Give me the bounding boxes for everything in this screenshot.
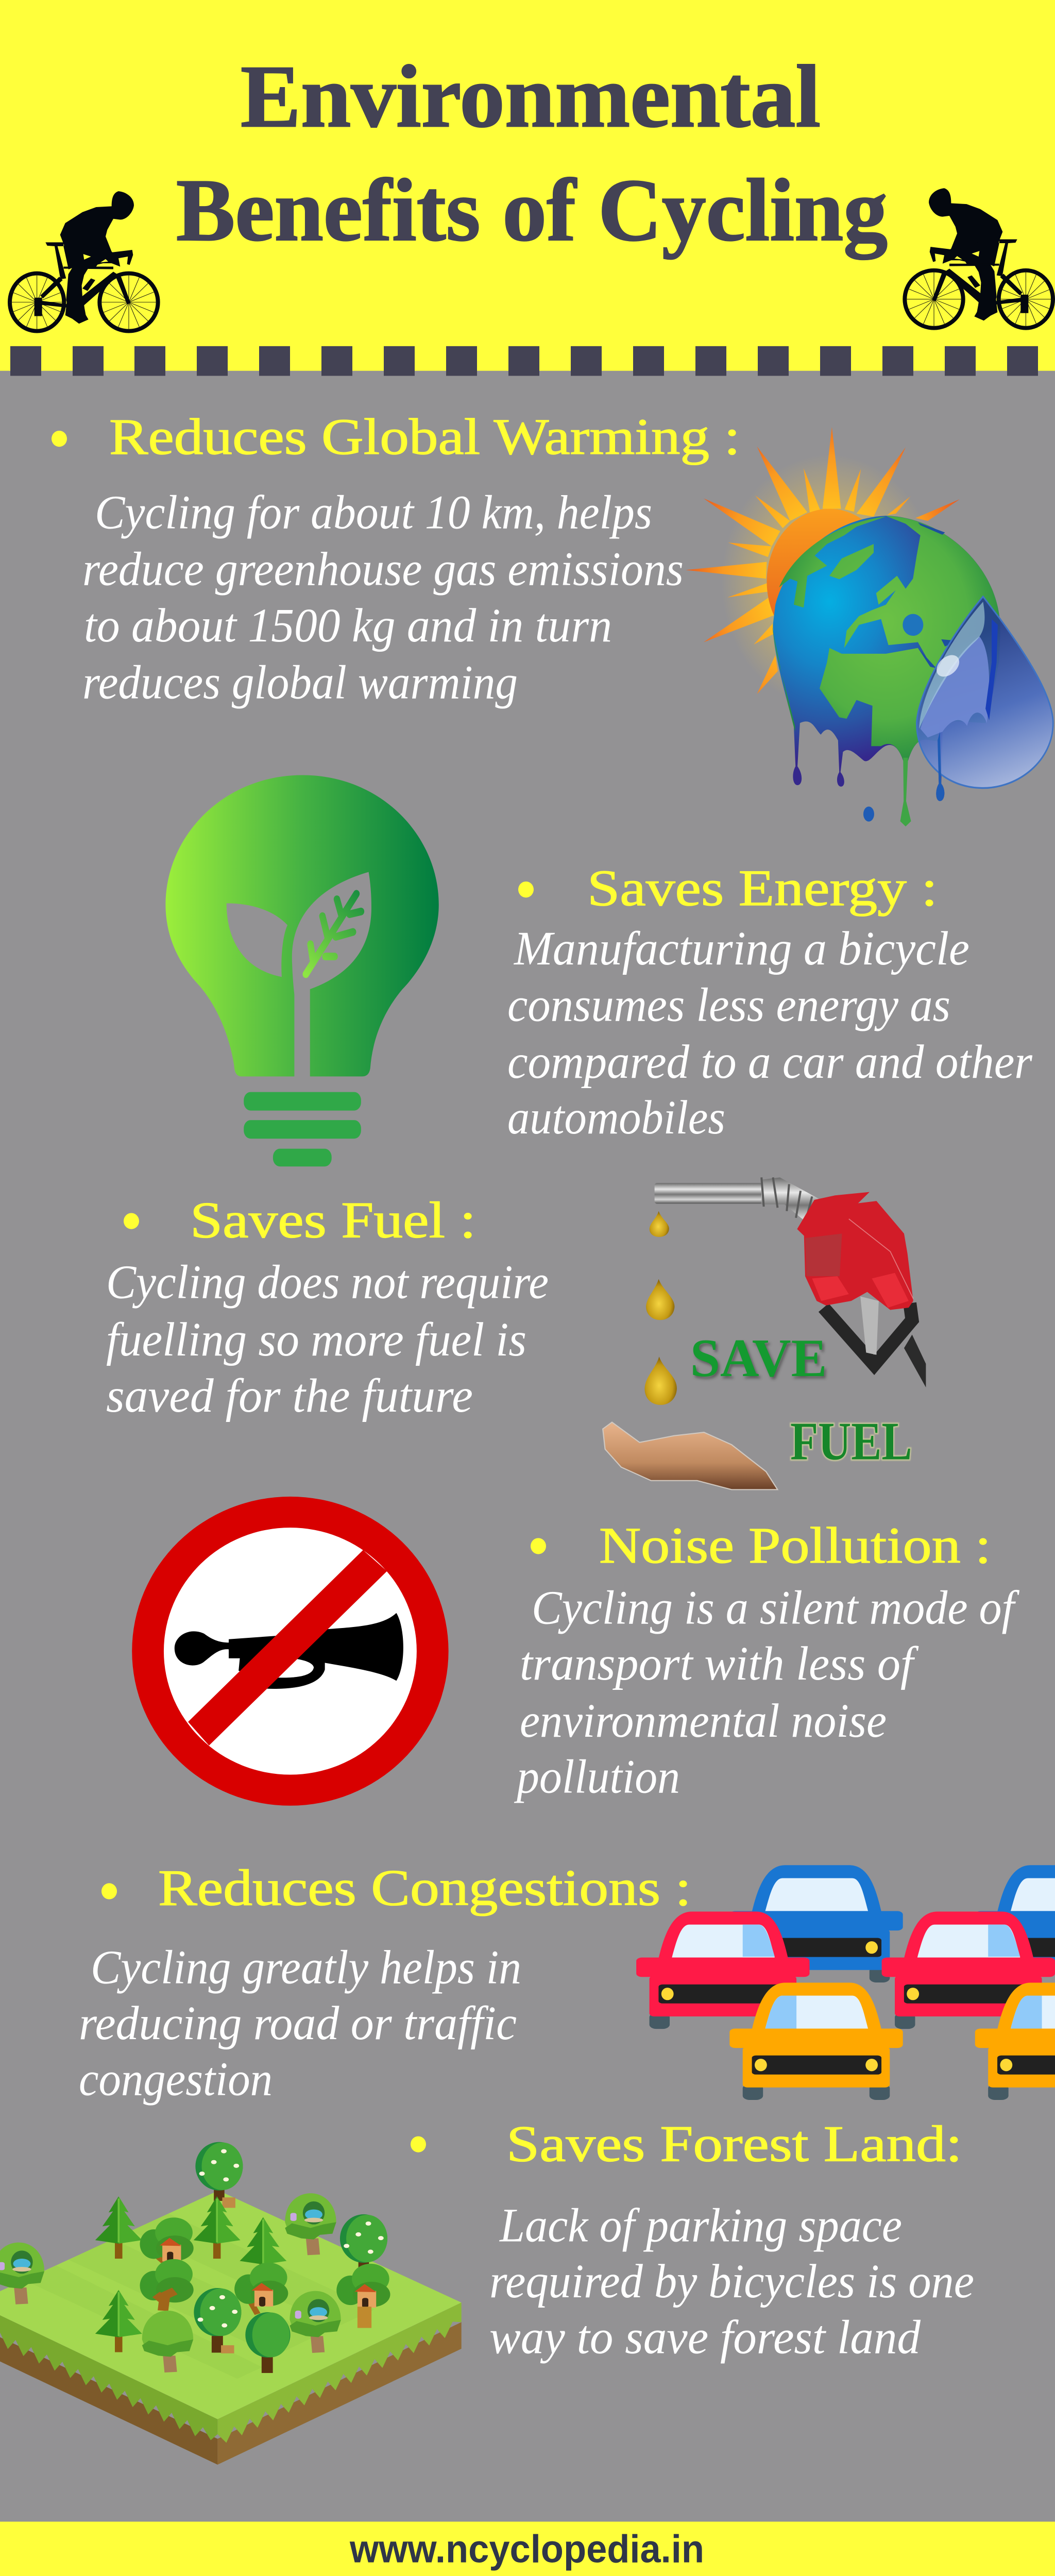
title: Environmental: [241, 47, 821, 146]
body text: Manufacturing a bicycle: [513, 921, 969, 975]
body text: reduces global warming: [82, 655, 518, 709]
sign ring: [132, 1497, 449, 1806]
bulb shape: [165, 775, 439, 1076]
heading: Noise Pollution :: [599, 1517, 991, 1574]
sun disc: [767, 509, 892, 654]
FUEL lettering: FUEL: [790, 1412, 912, 1471]
panel: reduces global warming: [52, 408, 1053, 826]
heading: Reduces Congestions :: [158, 1859, 691, 1916]
red cars: [636, 1911, 1055, 2029]
red handle: [797, 1192, 913, 1310]
icon: no horn sign: [132, 1497, 449, 1806]
bulb base: [244, 1092, 361, 1166]
body text: [106, 1255, 549, 1422]
SAVE lettering: SAVE: [690, 1328, 827, 1388]
FUEL lettering: FUEL: [790, 1412, 912, 1471]
panel: saves forest land: [0, 2115, 974, 2465]
road dashes: [10, 346, 1038, 376]
sun rays: [686, 427, 960, 694]
SAVE lettering: SAVE: [692, 1331, 829, 1390]
front plain tree: [245, 2312, 291, 2373]
front pine: [95, 2290, 142, 2352]
treehouse 2: [140, 2259, 194, 2311]
leaf vein: [306, 894, 361, 974]
panel: saves fuel: [106, 1177, 926, 1489]
body text: transport with less of: [520, 1636, 919, 1690]
nozzle pipe: [655, 1183, 762, 1204]
apple trees back: [194, 2142, 387, 2273]
icon: fuel nozzle with drops and hand: [603, 1177, 926, 1489]
body text: Cycling for about 10 km, helps: [95, 485, 652, 539]
globe: [773, 516, 1000, 801]
nozzle coil: [761, 1177, 812, 1224]
nest trees back: [0, 2193, 336, 2304]
orange cars: [729, 1982, 1055, 2100]
body text: pollution: [514, 1750, 680, 1803]
sun glow: [721, 454, 938, 708]
body text: [507, 921, 1033, 1144]
icon: cyclist right: [905, 188, 1054, 328]
prohibition bar: [188, 1550, 387, 1745]
heading: Reduces Global Warming :: [109, 408, 740, 465]
body text: [82, 485, 684, 709]
front dome tree: [142, 2311, 193, 2372]
panel: noise pollution: [132, 1497, 1020, 1806]
green drip: [900, 758, 911, 826]
bullet: [531, 1538, 546, 1554]
icon: light bulb with leaves: [165, 775, 439, 1166]
front nest tree: [290, 2291, 341, 2353]
treehouse 3: [234, 2263, 288, 2314]
grass top: [0, 2191, 462, 2419]
body text: saved for the future: [106, 1368, 473, 1422]
heading: Saves Forest Land:: [506, 2115, 962, 2172]
panel: reduces congestions: [79, 1859, 1055, 2106]
treehouse 1: [140, 2217, 194, 2263]
water drop: [916, 597, 1053, 801]
trigger guard: [824, 1303, 912, 1365]
body text: Cycling greatly helps in: [91, 1940, 521, 1994]
body text: [79, 1940, 521, 2106]
body text: Lack of parking space: [499, 2198, 902, 2252]
body text: reducing road or traffic: [79, 1996, 517, 2050]
bullet: [101, 1883, 117, 1900]
horn: [175, 1613, 403, 1689]
bullet: [411, 2136, 426, 2153]
icon: cyclist left: [9, 191, 158, 331]
body text: Cycling is a silent mode of: [532, 1580, 1020, 1634]
body text: environmental noise: [520, 1693, 887, 1748]
body text: congestion: [79, 2052, 273, 2106]
body text: [489, 2198, 974, 2364]
body text: way to save forest land: [489, 2310, 921, 2364]
body text: automobiles: [507, 1090, 725, 1144]
title: Benefits of Cycling: [176, 161, 888, 260]
falling droplet: [863, 806, 874, 822]
treehouse 4: [336, 2264, 390, 2328]
blue cars: [729, 1865, 1055, 1982]
header band: [0, 0, 1055, 376]
footer url: www.ncyclopedia.in: [349, 2527, 704, 2571]
title: [176, 47, 888, 260]
body text: fuelling so more fuel is: [106, 1312, 526, 1366]
bullet: [518, 882, 534, 897]
body text: [514, 1580, 1020, 1803]
footer band: [0, 2522, 1055, 2576]
land masses: [772, 516, 1000, 760]
body text: Cycling does not require: [106, 1255, 549, 1309]
hand: [603, 1422, 777, 1489]
icon: melting earth with sun and water drop: [686, 427, 1053, 826]
heading: Saves Energy :: [587, 859, 938, 917]
grass sides: [0, 2315, 217, 2440]
icon: traffic of cars: [636, 1865, 1055, 2100]
body text: required by bicycles is one: [489, 2254, 974, 2308]
body text: reduce greenhouse gas emissions: [82, 542, 684, 596]
body text: consumes less energy as: [507, 977, 950, 1031]
panel: saves energy: [165, 775, 1033, 1166]
bullet: [124, 1213, 139, 1229]
body text: to about 1500 kg and in turn: [84, 598, 612, 652]
soil sides: [0, 2337, 217, 2465]
oil drops: [650, 1211, 669, 1237]
bullet: [52, 431, 67, 447]
heading: Saves Fuel :: [190, 1191, 476, 1248]
pines: [95, 2196, 286, 2279]
icon: isometric forest: [0, 2142, 462, 2465]
front apple tree: [194, 2288, 241, 2353]
